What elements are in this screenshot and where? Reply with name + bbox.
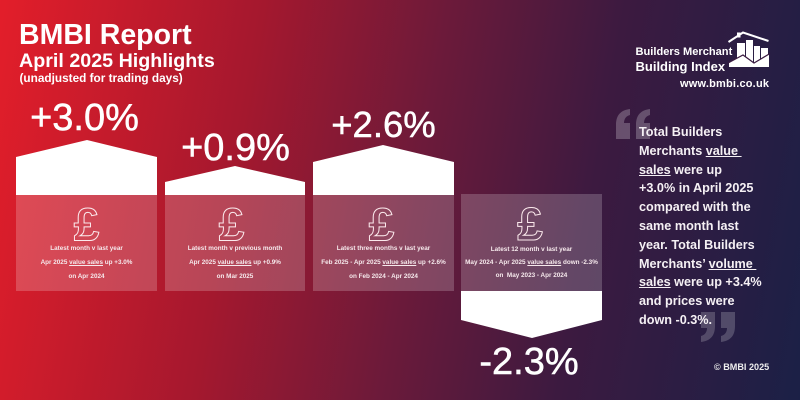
detail line: on May 2023 - Apr 2024 xyxy=(496,272,567,279)
detail line: on Apr 2024 xyxy=(68,273,105,280)
summary text: compared with the xyxy=(639,200,751,214)
logo text line 1: Builders Merchant xyxy=(636,46,732,58)
logo: Builders Merchant Building Index xyxy=(636,31,770,74)
value +2.6%: +2.6% xyxy=(331,104,436,144)
title: BMBI Report xyxy=(19,19,192,51)
logo text line 2: Building Index xyxy=(636,59,725,74)
summary text: Merchants value xyxy=(639,144,738,158)
summary text: Merchants’ volume xyxy=(639,257,753,271)
detail line: on Feb 2024 - Apr 2024 xyxy=(349,273,418,280)
detail line: Apr 2025 value sales up +0.9% xyxy=(189,259,281,266)
label line: Latest month v last year xyxy=(50,245,123,252)
summary text: year. Total Builders xyxy=(639,238,755,252)
label line: Latest 12 month v last year xyxy=(491,246,572,253)
detail line: Apr 2025 value sales up +3.0% xyxy=(41,259,132,266)
summary text xyxy=(639,125,762,327)
icon: pound sign: £ xyxy=(517,198,543,250)
summary text: same month last xyxy=(639,219,739,233)
copyright: © BMBI 2025 xyxy=(714,362,769,372)
value -2.3%: -2.3% xyxy=(479,341,579,383)
summary text: +3.0% in April 2025 xyxy=(639,181,753,195)
icon: pound sign: £ xyxy=(369,198,395,250)
summary text: Total Builders xyxy=(639,125,722,139)
label line: Latest three months v last year xyxy=(337,245,430,252)
opening quote mark xyxy=(616,109,650,139)
closing quote mark xyxy=(701,312,735,342)
subtitle: April 2025 Highlights xyxy=(19,50,215,72)
bar 1: house shape +3.0% xyxy=(16,140,157,195)
summary text: down -0.3%. xyxy=(639,313,712,327)
panel 2 xyxy=(165,195,305,291)
icon: pound sign: £ xyxy=(219,198,245,250)
panel 3 xyxy=(313,195,454,291)
label line: Latest month v previous month xyxy=(188,245,282,252)
icon: pound sign: £ xyxy=(74,198,100,250)
value +0.9%: +0.9% xyxy=(181,127,290,169)
bar 3: house shape +2.6% xyxy=(313,145,454,195)
detail line: Feb 2025 - Apr 2025 value sales up +2.6% xyxy=(321,259,446,266)
logo icon: house with chart xyxy=(728,31,770,67)
summary text: and prices were xyxy=(639,294,735,308)
detail line: on Mar 2025 xyxy=(217,273,253,280)
panel 1 xyxy=(16,195,157,291)
value +3.0%: +3.0% xyxy=(30,97,139,139)
website url: www.bmbi.co.uk xyxy=(680,78,769,90)
bar 4: inverted house shape -2.3% xyxy=(461,291,602,338)
summary text: sales were up xyxy=(639,163,722,177)
detail line: May 2024 - Apr 2025 value sales down -2.3% xyxy=(465,259,598,266)
panel 4 xyxy=(461,194,602,291)
summary text: sales were up +3.4% xyxy=(639,275,762,289)
subtitle note: (unadjusted for trading days) xyxy=(20,71,183,85)
bar 2: house shape +0.9% xyxy=(165,166,305,195)
